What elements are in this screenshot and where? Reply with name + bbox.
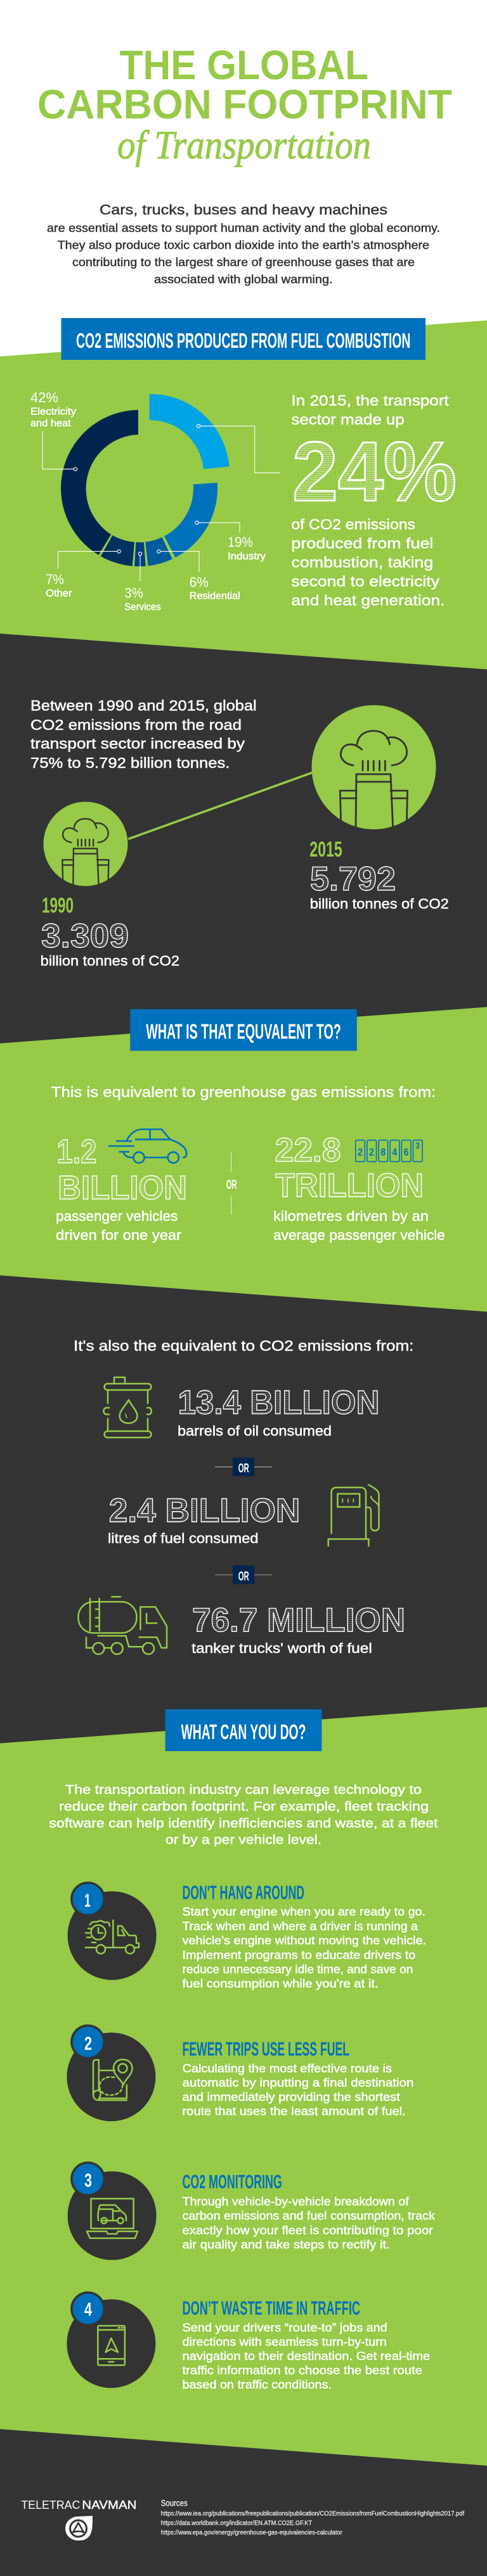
icon circle	[68, 2171, 157, 2260]
callout: transport 24%: produced from fuel	[291, 535, 433, 551]
intro line 3: contributing to the largest share of greenhouse gases that are	[72, 256, 415, 269]
number badge	[70, 2162, 105, 2197]
intro line 2: They also produce toxic carbon dioxide into the earth's atmosphere	[58, 239, 429, 252]
donut label: electricity and heat	[30, 390, 76, 429]
stat: 1.2 billion passenger vehicles	[56, 1129, 187, 1243]
slice: transport 24%	[150, 394, 230, 469]
slice: residential 6%	[145, 537, 172, 566]
icon: oil barrel	[104, 1377, 152, 1438]
callout text top: In 2015, the transport	[291, 392, 449, 409]
donut label: industry: Industry	[228, 551, 266, 562]
logo wordmark: TELETRAC	[21, 2498, 80, 2511]
number badge: 4	[84, 2299, 92, 2320]
callout: transport 24%: and heat generation.	[291, 592, 445, 609]
description: barrels of oil consumed	[178, 1423, 332, 1439]
step text: traffic information to choose the best route	[183, 2364, 422, 2377]
stat: 22.8 trillion kilometres: average passenger vehicle	[273, 1227, 445, 1243]
step text	[183, 2321, 430, 2391]
donut label: electricity and heat: Electricity	[30, 406, 76, 417]
step text: reduce unnecessary idle time, and save on	[183, 1963, 413, 1975]
or separator 2: OR	[238, 1569, 249, 1583]
number 22.8: 22.8	[275, 1132, 341, 1169]
step heading: CO2 MONITORING	[183, 2171, 282, 2193]
icon: odometer: 4	[392, 1146, 398, 1158]
slice: services 3%	[134, 542, 146, 566]
icon: odometer: 2	[369, 1146, 374, 1158]
step text	[183, 1906, 426, 1990]
description: kilometres driven by an	[273, 1208, 429, 1224]
divider: or: OR	[226, 1178, 237, 1192]
step text: and immediately providing the shortest	[183, 2091, 400, 2103]
donut chart	[61, 394, 229, 566]
donut label: residential: Residential	[190, 591, 240, 602]
donut label: residential	[190, 574, 240, 602]
stat: 2015: billion tonnes of CO2	[310, 896, 449, 912]
title script line: of Transportation	[117, 122, 371, 167]
sources: Sources	[161, 2499, 188, 2508]
icon: tanker truck	[78, 1597, 167, 1654]
stat: 2015: 5.792	[310, 860, 396, 898]
stat: 2015	[309, 838, 449, 912]
banner: CO2 emissions	[61, 318, 425, 360]
road transport statement: transport sector increased by	[30, 735, 245, 751]
icon: odometer	[356, 1140, 422, 1162]
intro line 1: are essential assets to support human activity and the global economy.	[47, 222, 440, 234]
or separator 1: OR	[238, 1462, 249, 1476]
stat: 13.4 billion barrels	[104, 1377, 379, 1439]
donut label: other: 7%	[46, 571, 64, 587]
banner: what is that equivalent to: WHAT IS THAT EQUVALENT TO?	[146, 1020, 341, 1043]
step text: Send your drivers “route-to” jobs and	[183, 2321, 387, 2334]
number badge	[70, 2292, 105, 2326]
step 4: don't waste time in traffic	[67, 2292, 430, 2391]
connector line 1990 to 2015	[128, 773, 312, 839]
donut label: residential: 6%	[190, 574, 209, 590]
icon: fuel pump	[328, 1485, 379, 1546]
value: 13.4 BILLION	[178, 1384, 379, 1421]
slice: industry 19%	[164, 483, 218, 558]
paragraph: leverage technology: software can help identify inefficiencies and waste, at a fleet	[49, 1816, 438, 1830]
word TRILLION: TRILLION	[275, 1167, 424, 1204]
paragraph: leverage technology	[49, 1782, 438, 1847]
step text: Calculating the most effective route is	[183, 2062, 392, 2075]
icon: route map	[93, 2060, 132, 2100]
step text: directions with seamless turn-by-turn	[183, 2335, 387, 2349]
heading: greenhouse gas equivalent: This is equivalent to greenhouse gas emissions from:	[51, 1083, 436, 1100]
icon: laptop with van	[87, 2198, 138, 2238]
callout: transport 24%: sector made up	[291, 411, 405, 428]
number badge: 1	[84, 1891, 91, 1911]
callout: transport 24%: combustion, taking	[291, 554, 433, 571]
step text	[183, 2062, 413, 2118]
sources	[161, 2499, 464, 2537]
title	[37, 42, 452, 167]
logo wordmark: NAVMAN	[82, 2498, 137, 2511]
number 1.2: 1.2	[57, 1133, 96, 1171]
sources: https://www.epa.gov/energy/greenhouse-gas-equivalencies-calculator	[161, 2529, 342, 2537]
stat: 1990	[41, 893, 179, 969]
step text: Track when and where a driver is running a	[183, 1920, 419, 1932]
icon: odometer: 8	[380, 1146, 386, 1158]
step heading: DON’T WASTE TIME IN TRAFFIC	[183, 2297, 360, 2319]
step text: based on traffic conditions.	[183, 2378, 332, 2391]
icon: truck and clock	[86, 1920, 139, 1954]
paragraph: leverage technology: reduce their carbon footprint. For example, fleet tracking	[59, 1799, 429, 1814]
step text: Through vehicle-by-vehicle breakdown of	[183, 2195, 410, 2208]
step 2: fewer trips	[67, 2024, 413, 2121]
step text: vehicle's engine without moving the vehicle.	[183, 1934, 426, 1947]
description: passenger vehicles	[56, 1208, 178, 1224]
logo mark	[65, 2516, 93, 2541]
circle icon: 1990 power plant	[43, 802, 128, 886]
step text: air quality and take steps to rectify it.	[183, 2238, 390, 2251]
step text: exactly how your fleet is contributing to poor	[183, 2224, 433, 2236]
value: 76.7 MILLION	[192, 1602, 405, 1639]
title line 2: CARBON FOOTPRINT	[37, 81, 452, 127]
road transport statement: 75% to 5.792 billion tonnes.	[30, 755, 230, 771]
step heading: FEWER TRIPS USE LESS FUEL	[183, 2037, 349, 2060]
donut leader lines	[42, 424, 280, 582]
word BILLION: BILLION	[58, 1170, 187, 1207]
or separator 2	[215, 1565, 272, 1584]
stat: 1990: 3.309	[41, 917, 129, 955]
donut label: services: 3%	[124, 585, 143, 601]
slice: other 7%	[101, 535, 134, 566]
step 3: CO2 monitoring	[68, 2162, 436, 2260]
stat: 1990: 1990	[42, 893, 74, 917]
intro line 4: associated with global warming.	[154, 273, 333, 286]
step text: Implement programs to educate drivers to	[183, 1949, 415, 1961]
description: tanker trucks' worth of fuel	[192, 1640, 372, 1656]
donut label: services: Services	[124, 602, 161, 613]
divider: or	[226, 1152, 237, 1214]
intro lead: Cars, trucks, buses and heavy machines	[100, 202, 387, 218]
road transport statement: CO2 emissions from the road	[30, 717, 242, 733]
paragraph: leverage technology: or by a per vehicle level.	[166, 1833, 321, 1847]
number badge	[70, 1882, 105, 1916]
icon circle	[67, 2299, 155, 2388]
callout: transport 24%: second to electricity	[291, 573, 440, 590]
banner: what can you do	[166, 1709, 321, 1751]
icon circle	[67, 2032, 155, 2121]
icon: odometer: 2	[358, 1146, 363, 1158]
step text: carbon emissions and fuel consumption, track	[183, 2210, 436, 2222]
intro text	[47, 202, 440, 286]
big number 24%: 24%	[292, 425, 457, 519]
banner: what can you do: WHAT CAN YOU DO?	[181, 1720, 306, 1744]
value: 2.4 BILLION	[109, 1492, 300, 1529]
donut label: other: Other	[46, 588, 72, 599]
stat: 1.2 billion passenger vehicles: driven for one year	[56, 1227, 181, 1243]
step text: fuel consumption while you're at it.	[183, 1977, 379, 1990]
banner: what is that equivalent to	[130, 1009, 357, 1051]
step text: Start your engine when you are ready to go.	[183, 1906, 425, 1918]
donut label: electricity and heat: 42%	[30, 390, 58, 405]
paragraph: leverage technology: The transportation industry can leverage technology to	[65, 1782, 422, 1797]
number badge: 2	[84, 2033, 92, 2054]
icon: odometer: 3	[415, 1140, 420, 1151]
road transport statement	[30, 697, 257, 771]
step 1: don't hang around	[68, 1882, 426, 1990]
step text	[183, 2195, 436, 2251]
stat: 22.8 trillion kilometres	[273, 1132, 445, 1243]
donut label: other	[46, 571, 72, 599]
slice: electricity and heat 42%	[61, 410, 138, 555]
stat: 2.4 billion litres	[108, 1485, 379, 1546]
icon circle	[68, 1891, 157, 1980]
circle icon: 2015 power plant	[312, 705, 436, 829]
donut label: industry	[228, 534, 266, 562]
icon: car	[109, 1129, 186, 1163]
logo wordmark	[21, 2498, 136, 2511]
donut label: electricity and heat: and heat	[30, 418, 71, 429]
icon: odometer: 6	[403, 1146, 408, 1158]
step text: route that uses the least amount of fuel.	[183, 2105, 406, 2118]
callout text bottom: of CO2 emissions	[291, 516, 415, 532]
stat: 76.7 million tanker trucks	[78, 1597, 405, 1656]
sources: https://data.worldbank.org/indicator/EN.ATM.CO2E.GF.KT	[161, 2520, 313, 2527]
stat: 1990: billion tonnes of CO2	[41, 953, 179, 969]
description: litres of fuel consumed	[108, 1531, 259, 1546]
title line 1: THE GLOBAL	[120, 42, 368, 88]
number badge: 3	[84, 2170, 92, 2191]
step text: automatic by inputting a final destination	[183, 2077, 413, 2089]
number badge	[70, 2024, 105, 2059]
icon: phone navigation	[98, 2326, 125, 2365]
heading: CO2 equivalent: It's also the equivalent to CO2 emissions from:	[74, 1337, 413, 1354]
donut label: services	[124, 585, 161, 613]
step text: navigation to their destination. Get real-time	[183, 2349, 430, 2362]
donut label: industry: 19%	[228, 534, 253, 550]
or separator 1	[215, 1458, 272, 1476]
callout: transport 24%	[291, 392, 457, 609]
step heading: DON'T HANG AROUND	[183, 1882, 304, 1903]
road transport statement: Between 1990 and 2015, global	[30, 697, 257, 713]
logo: Teletrac Navman	[21, 2498, 136, 2541]
stat: 2015: 2015	[309, 838, 342, 862]
